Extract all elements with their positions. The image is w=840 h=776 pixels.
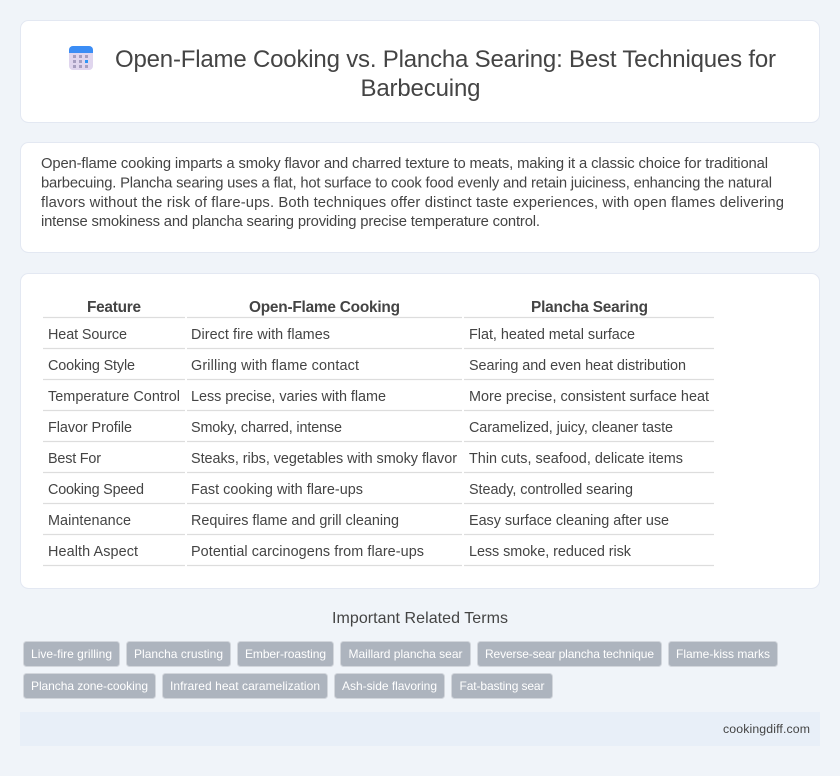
heading: related terms: Important Related Terms — [332, 610, 508, 627]
title: Barbecuing — [360, 75, 480, 102]
row: cooking speed: Fast cooking with flare-ups — [191, 482, 363, 498]
tags: related terms: Fat-basting sear — [460, 679, 544, 693]
row: health aspect: Less smoke, reduced risk — [469, 544, 632, 560]
row: heat source: Flat, heated metal surface — [469, 327, 635, 343]
footer — [20, 712, 820, 746]
row: maintenance: Maintenance — [48, 513, 131, 529]
panel: comparison table — [20, 274, 820, 588]
row: temperature control: Less precise, varies with flame — [191, 389, 386, 405]
row: cooking speed: Cooking Speed — [48, 482, 144, 498]
tags: related terms: Flame-kiss marks — [676, 647, 770, 661]
footer: cookingdiff.com — [723, 722, 810, 736]
tags: related terms: Plancha zone-cooking — [31, 679, 148, 693]
row: health aspect: Potential carcinogens from flare-ups — [191, 544, 424, 560]
panel: header — [20, 20, 820, 122]
row: heat source — [48, 327, 635, 343]
row: health aspect: Health Aspect — [48, 544, 138, 560]
table header — [87, 299, 648, 316]
row: cooking style: Searing and even heat distribution — [469, 358, 686, 374]
intro text: flavors without the risk of flare-ups. Both techniques offer distinct taste experiences, with open flames delivering — [41, 195, 784, 211]
row: temperature control: Temperature Control — [48, 389, 180, 405]
intro text: Open-flame cooking imparts a smoky flavor and charred texture to meats, making it a classic choice for traditional — [41, 156, 768, 172]
tags: related terms: Ash-side flavoring — [342, 679, 437, 693]
row: best for: Thin cuts, seafood, delicate items — [469, 451, 683, 467]
intro text: intense smokiness and plancha searing providing precise temperature control. — [41, 214, 540, 230]
table header: Plancha Searing — [531, 299, 648, 316]
table header: Open-Flame Cooking — [249, 299, 400, 316]
intro text: barbecuing. Plancha searing uses a flat, hot surface to cook food evenly and retain juiciness, enhancing the natural — [41, 176, 772, 192]
row: heat source: Direct fire with flames — [191, 327, 330, 343]
row: maintenance: Requires flame and grill cleaning — [191, 513, 399, 529]
row: cooking style: Grilling with flame contact — [191, 358, 359, 374]
tags: related terms: Plancha crusting — [134, 647, 223, 661]
row: cooking speed: Steady, controlled searing — [469, 482, 633, 498]
title: Open-Flame Cooking vs. Plancha Searing: Best Techniques for — [115, 46, 776, 73]
row: best for — [48, 451, 683, 467]
row: best for: Steaks, ribs, vegetables with smoky flavor — [191, 451, 457, 467]
tags: related terms: Ember-roasting — [245, 647, 326, 661]
tags: related terms — [24, 642, 778, 698]
row: cooking style: Cooking Style — [48, 358, 135, 374]
row: flavor profile: Flavor Profile — [48, 420, 132, 436]
row: best for: Best For — [48, 451, 101, 467]
row: health aspect — [48, 544, 632, 560]
row: temperature control — [48, 389, 709, 405]
row: cooking style — [48, 358, 686, 374]
tags: related terms: Live-fire grilling — [31, 647, 112, 661]
table header: Feature — [87, 299, 141, 316]
row: temperature control: More precise, consistent surface heat — [469, 389, 709, 405]
row: maintenance: Easy surface cleaning after use — [469, 513, 669, 529]
row: maintenance — [48, 513, 669, 529]
tags: related terms: Reverse-sear plancha technique — [485, 647, 654, 661]
icon: calendar — [69, 46, 93, 70]
row: cooking speed — [48, 482, 633, 498]
row: flavor profile: Caramelized, juicy, cleaner taste — [469, 420, 673, 436]
row: flavor profile — [48, 420, 673, 436]
panel: introduction — [20, 142, 820, 252]
row: heat source: Heat Source — [48, 327, 127, 343]
tags: related terms: Maillard plancha sear — [348, 647, 462, 661]
tags: related terms: Infrared heat caramelization — [170, 679, 320, 693]
row: flavor profile: Smoky, charred, intense — [191, 420, 342, 436]
